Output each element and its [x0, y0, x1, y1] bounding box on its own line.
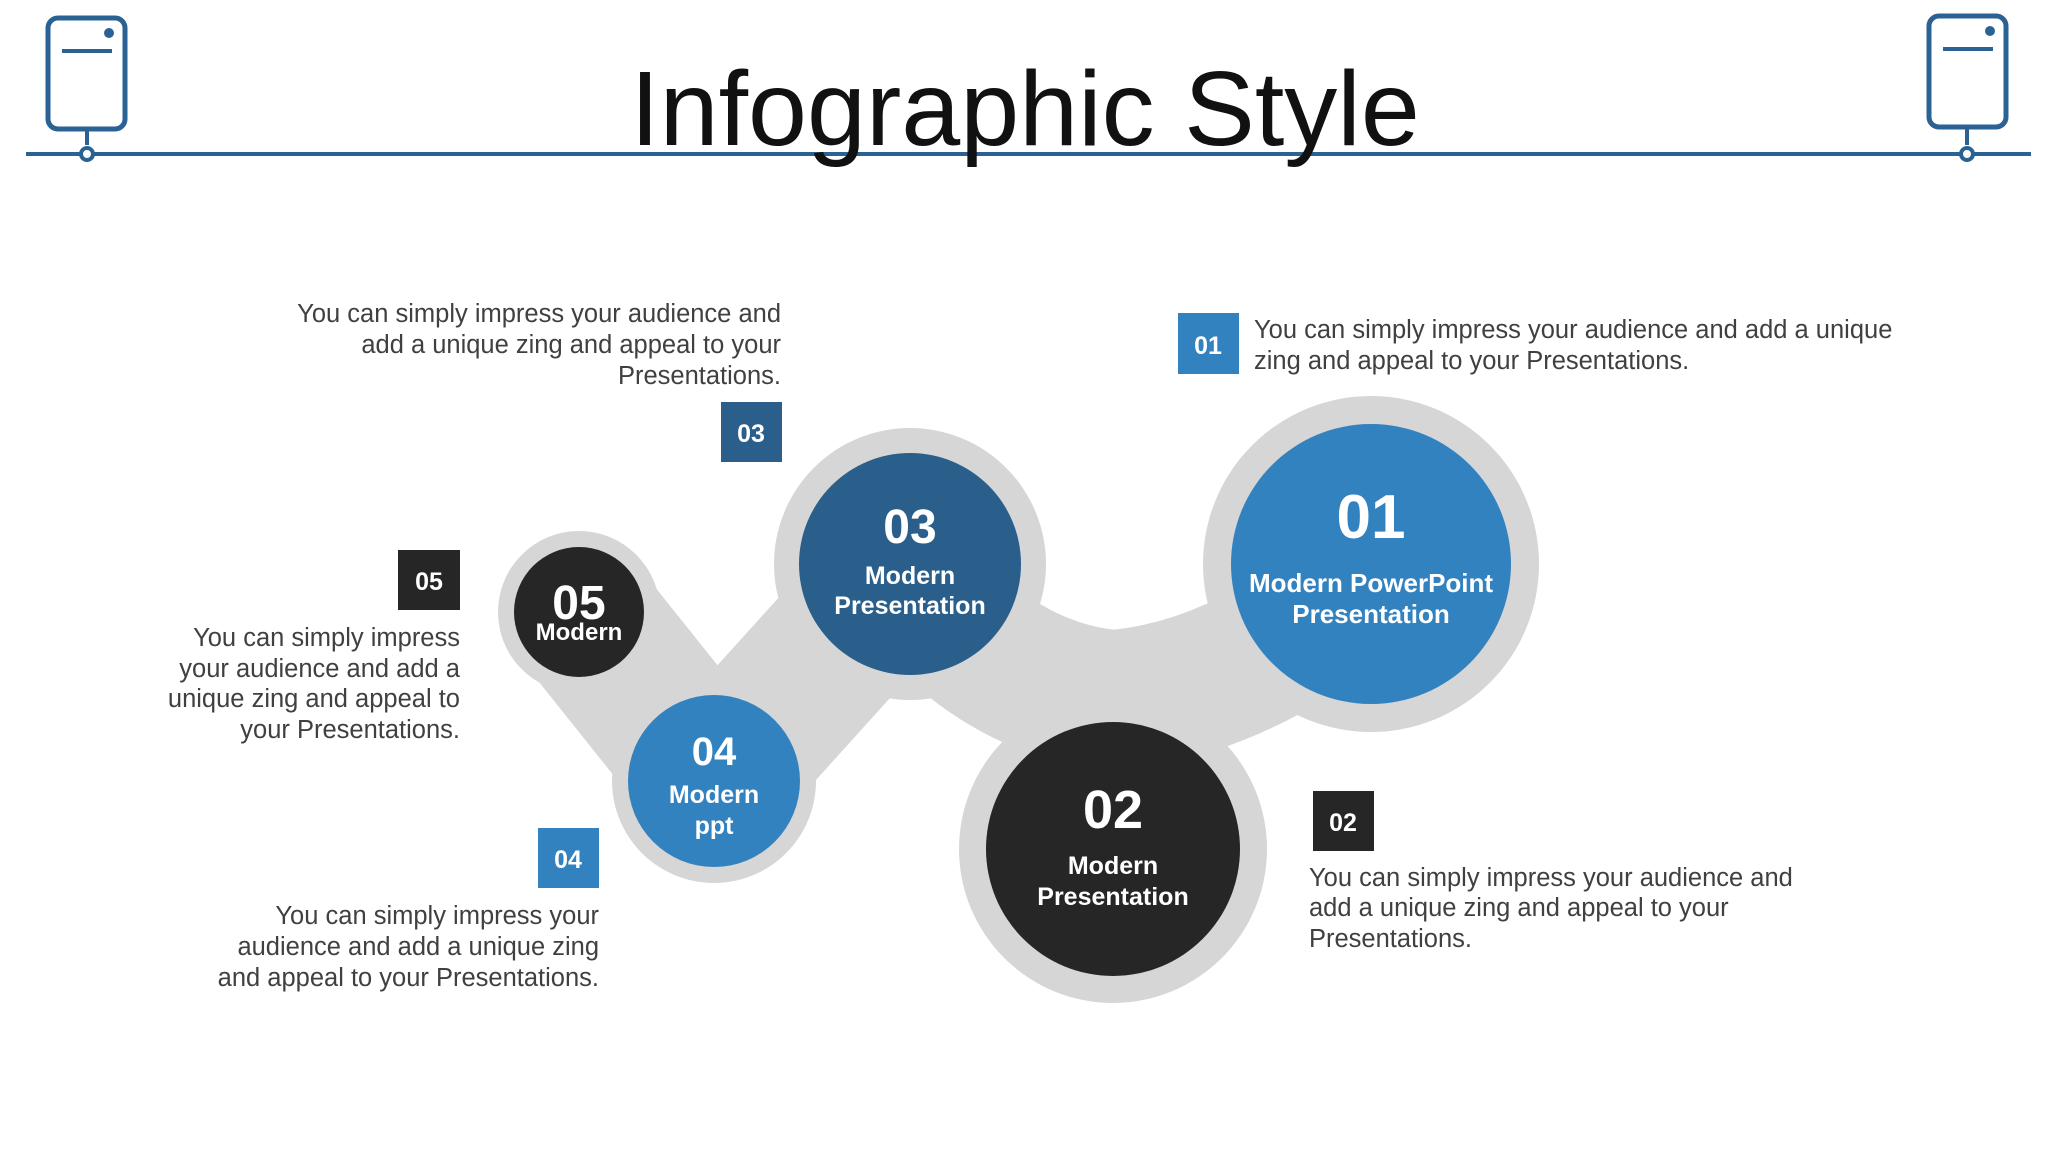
- label 01: 01: [1194, 332, 1222, 360]
- circle 04: [628, 695, 800, 867]
- label 04: 04: [554, 846, 582, 874]
- label 05: [168, 550, 461, 744]
- icon: left device: [48, 18, 125, 160]
- label 01: zing and appeal to your Presentations.: [1254, 347, 1689, 375]
- circle 01: Modern PowerPoint: [1249, 568, 1493, 598]
- gray connector blob: [498, 396, 1539, 1003]
- label 05: You can simply impress: [193, 624, 460, 652]
- circle 03: [799, 453, 1021, 675]
- circle 02: Presentation: [1037, 883, 1189, 911]
- circle 03: 03: [883, 501, 937, 554]
- label 02: You can simply impress your audience and: [1309, 864, 1793, 892]
- label 02: Presentations.: [1309, 925, 1472, 953]
- header rule: [26, 152, 2031, 156]
- label 03: Presentations.: [618, 362, 781, 390]
- label 02: 02: [1329, 809, 1357, 837]
- label 01: You can simply impress your audience and add a unique: [1254, 316, 1892, 344]
- label 03: 03: [737, 420, 765, 448]
- label 03: You can simply impress your audience and: [297, 300, 781, 328]
- label 03: [297, 300, 782, 462]
- label 04: and appeal to your Presentations.: [218, 964, 599, 992]
- title: Infographic Style: [630, 50, 1420, 168]
- circle 05: 05: [552, 577, 606, 630]
- circle 01: [1231, 424, 1511, 704]
- icon: right device: [1929, 16, 2006, 160]
- circle 05: Modern: [536, 619, 622, 646]
- circle 03: Presentation: [834, 592, 986, 620]
- label 04: audience and add a unique zing: [237, 933, 599, 961]
- circle 04: ppt: [695, 812, 734, 840]
- label 05: unique zing and appeal to: [168, 685, 460, 713]
- label 04: [218, 828, 600, 992]
- circle 03: Modern: [865, 562, 955, 590]
- label 05: your Presentations.: [240, 716, 460, 744]
- label 02: [1309, 791, 1793, 953]
- label 02: add a unique zing and appeal to your: [1309, 894, 1729, 922]
- label 05: 05: [415, 568, 443, 596]
- circle 05: [514, 547, 644, 677]
- label 03: add a unique zing and appeal to your: [361, 331, 782, 359]
- circle 04: Modern: [669, 781, 759, 809]
- label 05: your audience and add a: [179, 655, 461, 683]
- label 04: You can simply impress your: [275, 902, 600, 930]
- circle 02: Modern: [1068, 852, 1158, 880]
- circle 01: 01: [1337, 483, 1405, 552]
- circle 02: 02: [1083, 780, 1143, 840]
- circle 01: Presentation: [1292, 599, 1450, 629]
- circle 04: 04: [692, 730, 737, 774]
- circle 02: [986, 722, 1240, 976]
- label 01: [1178, 313, 1892, 375]
